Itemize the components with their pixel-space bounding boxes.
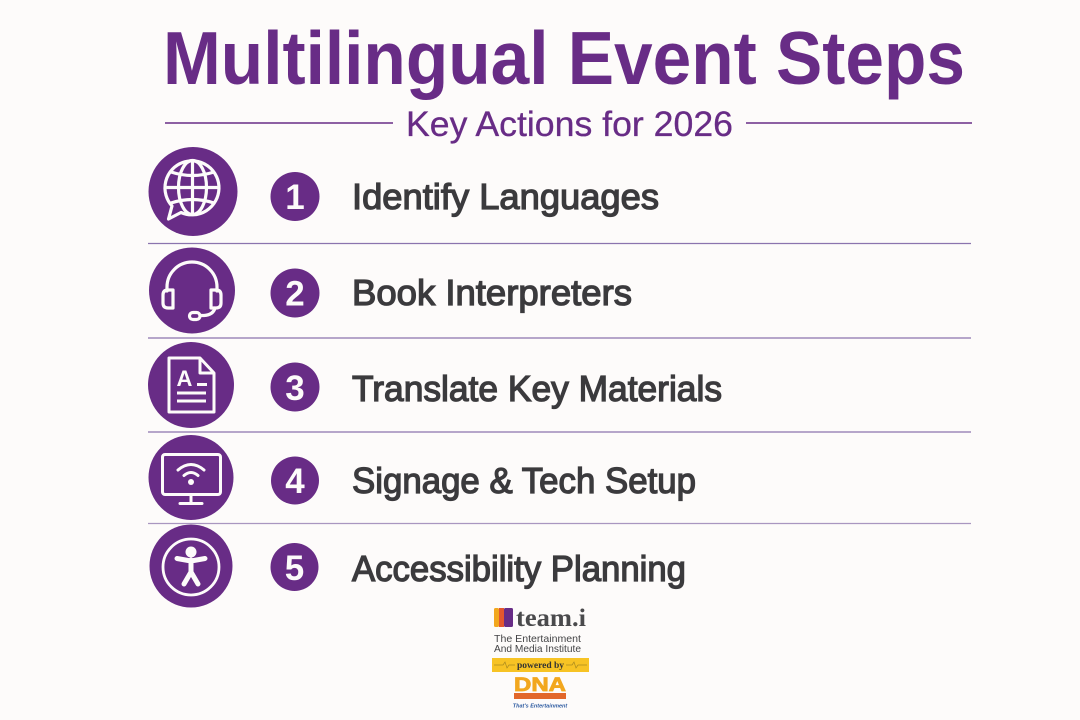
logo mark — [494, 608, 513, 627]
label: identify languages: Identify Languages — [352, 176, 659, 217]
step 5: accessibility planning — [150, 524, 686, 608]
label: book interpreters: Book Interpreters — [352, 272, 632, 313]
label: signage and tech setup: Signage & Tech Setup — [352, 460, 696, 501]
icon: globe speech bubble — [148, 147, 238, 236]
DNA logo: DNA — [514, 675, 566, 696]
label: accessibility planning: Accessibility Planning — [352, 548, 686, 589]
icon: accessibility figure — [150, 524, 232, 608]
label: translate key materials: Translate Key Materials — [352, 368, 722, 409]
number badge 4: 4 — [285, 462, 305, 501]
number badge 4 — [271, 456, 319, 504]
logo block: team.i powered by DNA — [492, 605, 589, 710]
logo wordmark: team.i — [516, 605, 586, 632]
number badge 5: 5 — [285, 549, 304, 588]
logo tagline: The Entertainment — [494, 633, 581, 645]
number badge 3: 3 — [285, 369, 305, 408]
number badge 2 — [270, 268, 320, 318]
number badge 5 — [270, 543, 318, 591]
icon: headset — [149, 248, 235, 334]
step 3: translate key materials — [148, 342, 722, 428]
step 4: signage and tech setup — [148, 435, 696, 520]
title: Multilingual Event Steps — [163, 16, 965, 100]
subtitle with rules: Key Actions for 2026 — [406, 105, 733, 144]
icon: document: A — [176, 366, 192, 391]
logo block: team.i powered by DNA: And Media Institute — [494, 643, 581, 655]
icon: monitor with wifi — [148, 435, 234, 520]
step 1: identify languages — [148, 147, 659, 236]
number badge 1: 1 — [285, 178, 305, 217]
number badge 3 — [270, 362, 320, 412]
DNA logo: That's Entertainment — [513, 704, 568, 710]
number badge 1 — [270, 172, 320, 221]
icon: document — [148, 342, 234, 428]
DNA logo — [513, 675, 568, 710]
step 2: book interpreters — [149, 248, 632, 334]
powered by band: powered by — [517, 661, 564, 671]
number badge 2: 2 — [285, 274, 305, 314]
